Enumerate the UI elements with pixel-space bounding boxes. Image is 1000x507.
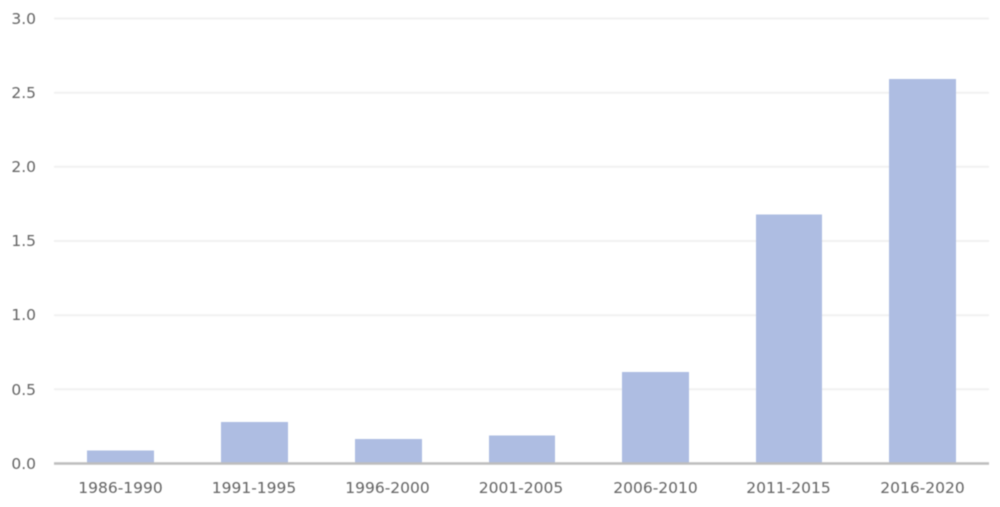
y axis labels: 1.0 <box>11 306 36 324</box>
y axis labels: 3.0 <box>11 10 36 28</box>
x axis labels: 1991-1995 <box>212 479 296 497</box>
x axis line <box>54 462 989 465</box>
y axis labels <box>11 10 36 473</box>
y axis labels: 2.5 <box>11 84 36 102</box>
y axis labels: 0.5 <box>11 381 36 399</box>
x axis labels: 2006-2010 <box>613 479 698 497</box>
x axis labels <box>78 479 965 497</box>
bars <box>87 79 956 464</box>
x axis labels: 2016-2020 <box>880 479 965 497</box>
x axis labels: 1996-2000 <box>345 479 430 497</box>
x axis labels: 2011-2015 <box>746 479 831 497</box>
y axis labels: 0.0 <box>11 455 36 473</box>
y axis labels: 2.0 <box>11 158 36 176</box>
x axis labels: 1986-1990 <box>78 479 163 497</box>
x axis labels: 2001-2005 <box>479 479 563 497</box>
y axis labels: 1.5 <box>11 232 36 250</box>
